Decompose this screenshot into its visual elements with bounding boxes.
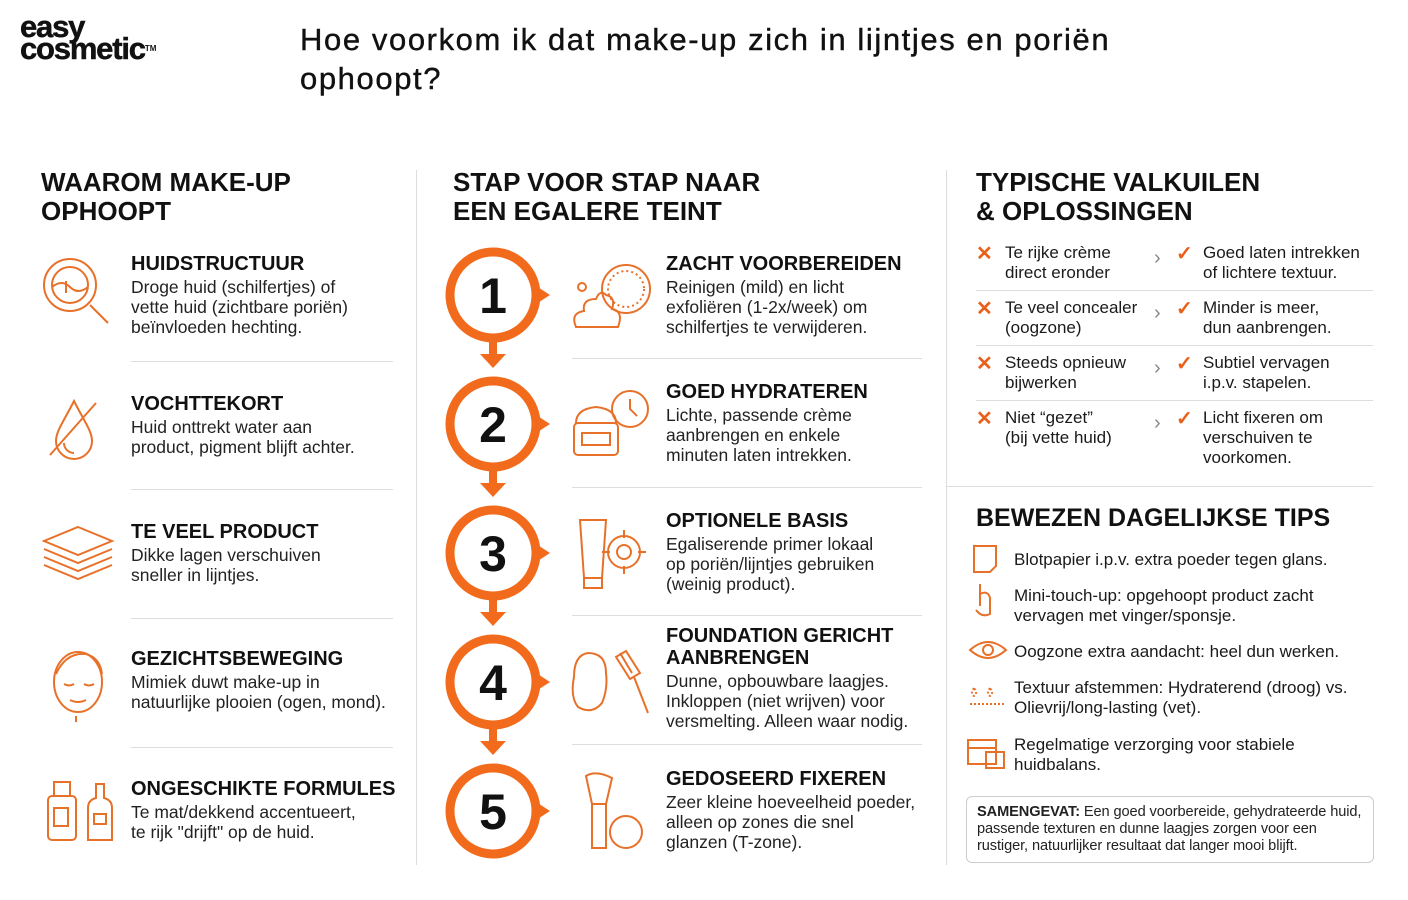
tip list: [967, 545, 1348, 774]
step 5: GEDOSEERD FIXEREN: [666, 768, 886, 790]
pitfall rows: ✓: [1176, 243, 1193, 265]
pitfall rows: ✓: [1176, 408, 1193, 430]
pitfall rows: Te rijke crème: [1005, 243, 1111, 262]
heading: causes: OPHOOPT: [41, 196, 171, 226]
step 4: versmelting. Alleen waar nodig.: [666, 711, 908, 731]
step numbers chain: 5: [479, 784, 507, 840]
panel: causes: [41, 167, 395, 842]
step 5: alleen op zones die snel: [666, 812, 854, 832]
pitfall rows: ✕: [976, 353, 993, 375]
pitfall rows: Te veel concealer: [1005, 298, 1137, 317]
pitfall rows: ›: [1154, 357, 1161, 379]
step numbers chain: [446, 248, 550, 858]
panel: steps: [446, 167, 922, 858]
pitfall rows: i.p.v. stapelen.: [1203, 373, 1311, 392]
cause 1: beïnvloeden hechting.: [131, 317, 302, 337]
step 3: [578, 510, 874, 594]
logo: [20, 9, 156, 66]
step 4: FOUNDATION GERICHT: [666, 625, 893, 647]
pitfall rows: bijwerken: [1005, 373, 1077, 392]
pitfall rows: [976, 243, 1373, 467]
step numbers chain: 3: [479, 526, 507, 582]
panel: pitfalls: [976, 167, 1373, 467]
tip list: vervagen met vinger/sponsje.: [1014, 606, 1236, 625]
heading: pitfalls: [976, 167, 1260, 226]
step 3: op poriën/lijntjes gebruiken: [666, 554, 874, 574]
pitfall rows: Goed laten intrekken: [1203, 243, 1360, 262]
cause 5: ONGESCHIKTE FORMULES: [131, 778, 395, 800]
pitfall rows: (bij vette huid): [1005, 428, 1112, 447]
heading: pitfalls: TYPISCHE VALKUILEN: [976, 167, 1260, 197]
logo: easy: [20, 9, 84, 44]
heading: steps: [453, 167, 760, 226]
pitfall rows: Licht fixeren om: [1203, 408, 1323, 427]
pitfall rows: Subtiel vervagen: [1203, 353, 1330, 372]
cause 5: te rijk "drijft" op de huid.: [131, 822, 315, 842]
heading: causes: [41, 167, 291, 226]
step 1: schilfertjes te verwijderen.: [666, 317, 867, 337]
tip list: Blotpapier i.p.v. extra poeder tegen glans.: [1014, 550, 1327, 569]
cause 2: Huid onttrekt water aan: [131, 417, 312, 437]
cause 4: GEZICHTSBEWEGING: [131, 648, 343, 670]
cause 4: Mimiek duwt make-up in: [131, 672, 320, 692]
step 2: GOED HYDRATEREN: [666, 381, 868, 403]
pitfall rows: ✕: [976, 298, 993, 320]
pitfall rows: ›: [1154, 247, 1161, 269]
tip list: Oogzone extra aandacht: heel dun werken.: [1014, 642, 1339, 661]
pitfall rows: (oogzone): [1005, 318, 1082, 337]
pitfall rows: Steeds opnieuw: [1005, 353, 1126, 372]
step 4: [572, 625, 908, 731]
step 5: [584, 768, 915, 852]
pitfall rows: ✕: [976, 243, 993, 265]
cause 2: VOCHTTEKORT: [131, 393, 283, 415]
tip list: Textuur afstemmen: Hydraterend (droog) vs.: [1014, 678, 1348, 697]
heading: steps: STAP VOOR STAP NAAR: [453, 167, 760, 197]
title: Hoe voorkom ik dat make-up zich in lijntjes en poriën ophoopt?: [300, 22, 1110, 96]
step numbers chain: 2: [479, 397, 507, 453]
cause 3: Dikke lagen verschuiven: [131, 545, 321, 565]
cause 2: product, pigment blijft achter.: [131, 437, 355, 457]
step numbers chain: 1: [479, 268, 507, 324]
logo: cosmeticTM: [20, 31, 156, 66]
step 4: Inkloppen (niet wrijven) voor: [666, 691, 885, 711]
pitfall rows: Niet “gezet”: [1005, 408, 1093, 427]
step 2: aanbrengen en enkele: [666, 425, 840, 445]
step numbers chain: 4: [479, 655, 507, 711]
step 4: AANBRENGEN: [666, 647, 809, 669]
pitfall rows: ✓: [1176, 298, 1193, 320]
pitfall rows: direct eronder: [1005, 263, 1110, 282]
cause 2: [49, 393, 355, 460]
tip list: Regelmatige verzorging voor stabiele: [1014, 735, 1295, 754]
cause 1: vette huid (zichtbare poriën): [131, 297, 348, 317]
summary box: SAMENGEVAT: Een goed voorbereide, gehydrateerde huid, passende texturen en dunne laagjes zorgen voor een rustiger, natuurlijker resultaat dat langer mooi blijft.: [977, 804, 1361, 854]
step 3: OPTIONELE BASIS: [666, 510, 848, 532]
pitfall rows: ✕: [976, 408, 993, 430]
step 1: ZACHT VOORBEREIDEN: [666, 253, 902, 275]
cause 3: sneller in lijntjes.: [131, 565, 259, 585]
step 1: [573, 253, 902, 337]
heading: tips: BEWEZEN DAGELIJKSE TIPS: [976, 504, 1330, 532]
step 2: minuten laten intrekken.: [666, 445, 852, 465]
cause 5: [47, 778, 395, 842]
panel: daily tips: [966, 504, 1374, 863]
heading: steps: EEN EGALERE TEINT: [453, 196, 722, 226]
pitfall rows: ✓: [1176, 353, 1193, 375]
step 4: Dunne, opbouwbare laagjes.: [666, 671, 889, 691]
cause 1: [43, 253, 348, 337]
step 5: glanzen (T-zone).: [666, 832, 802, 852]
step 1: exfoliëren (1-2x/week) om: [666, 297, 867, 317]
pitfall rows: ›: [1154, 412, 1161, 434]
step 3: Egaliserende primer lokaal: [666, 534, 873, 554]
tip list: Mini-touch-up: opgehoopt product zacht: [1014, 586, 1314, 605]
tip list: Olievrij/long-lasting (vet).: [1014, 698, 1201, 717]
pitfall rows: of lichtere textuur.: [1203, 263, 1337, 282]
heading: causes: WAAROM MAKE-UP: [41, 167, 291, 197]
pitfall rows: voorkomen.: [1203, 448, 1292, 467]
tip list: huidbalans.: [1014, 755, 1101, 774]
pitfall rows: verschuiven te: [1203, 428, 1313, 447]
step 5: Zeer kleine hoeveelheid poeder,: [666, 792, 915, 812]
step 2: Lichte, passende crème: [666, 405, 852, 425]
cause 3: TE VEEL PRODUCT: [131, 521, 318, 543]
cause 4: [53, 648, 386, 722]
cause 4: natuurlijke plooien (ogen, mond).: [131, 692, 386, 712]
cause 3: [42, 521, 321, 585]
step 1: Reinigen (mild) en licht: [666, 277, 844, 297]
step 3: (weinig product).: [666, 574, 795, 594]
step 2: [573, 381, 868, 465]
cause 5: Te mat/dekkend accentueert,: [131, 802, 356, 822]
pitfall rows: dun aanbrengen.: [1203, 318, 1332, 337]
pitfall rows: Minder is meer,: [1203, 298, 1319, 317]
cause 1: Droge huid (schilfertjes) of: [131, 277, 335, 297]
pitfall rows: ›: [1154, 302, 1161, 324]
heading: pitfalls: & OPLOSSINGEN: [976, 196, 1193, 226]
cause 1: HUIDSTRUCTUUR: [131, 253, 304, 275]
